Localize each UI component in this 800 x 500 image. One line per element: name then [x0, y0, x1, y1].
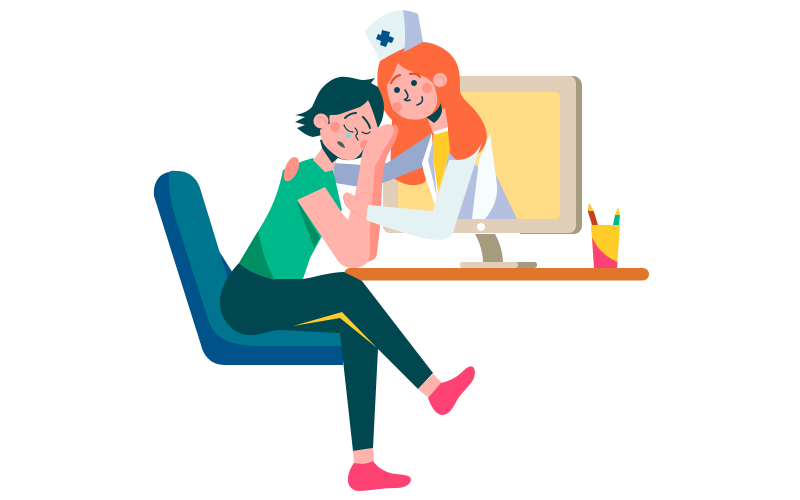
nurse shirt [433, 131, 450, 191]
patient arm [297, 124, 394, 268]
nurse hair [377, 42, 487, 185]
chair [154, 171, 345, 365]
desk [344, 268, 649, 280]
nurse head [387, 63, 447, 120]
patient hair [295, 77, 384, 137]
nurse ear [433, 73, 447, 87]
nurse brows [391, 74, 420, 83]
nurse neck and collar [426, 103, 448, 136]
patient beard [320, 135, 365, 163]
patient ear [314, 114, 328, 128]
nurse nose and mouth [404, 90, 422, 105]
nurse arm hugging patient [333, 133, 432, 187]
nurse coat [366, 131, 482, 240]
patient face [320, 100, 378, 160]
trouser highlight [293, 312, 377, 348]
patient head [295, 77, 384, 163]
icon: medical cross [376, 30, 394, 47]
nurse face [387, 63, 437, 120]
nurse eyes [394, 87, 400, 93]
patient brows and eyes [345, 113, 370, 128]
nurse cheeks [422, 83, 432, 93]
nurse sleeve [366, 142, 482, 240]
patient cheeks [330, 122, 340, 132]
patient mouth [337, 141, 345, 148]
patient legs [220, 263, 433, 451]
patient shirt [239, 158, 342, 280]
lower foot [348, 448, 411, 491]
monitor [383, 76, 582, 268]
patient neck [313, 147, 338, 172]
patient raised arm salmon edge [362, 124, 398, 262]
monitor stand [475, 234, 503, 263]
pencil cup [588, 203, 620, 268]
nurse hand [343, 192, 371, 220]
patient shoulder [284, 157, 299, 181]
nurse cap [365, 10, 423, 61]
lapel [422, 133, 438, 205]
upper foot [418, 366, 475, 415]
nurse body on screen [440, 133, 517, 219]
patient tear [346, 131, 351, 138]
